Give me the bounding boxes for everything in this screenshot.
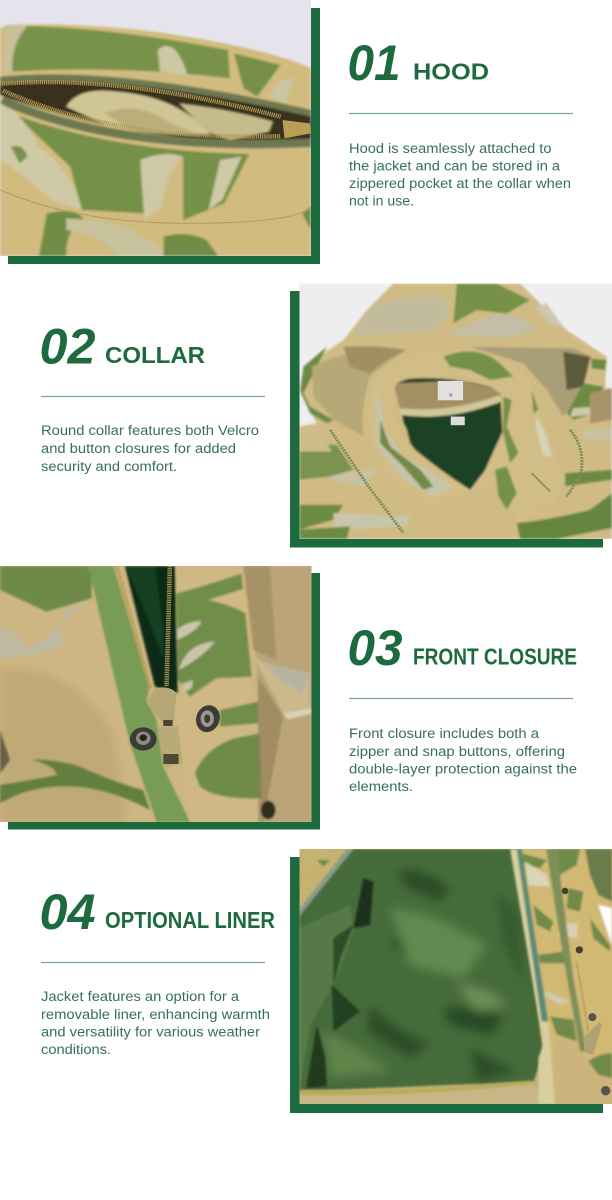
photo frame accent: front closure xyxy=(8,573,320,830)
section 1: hood xyxy=(0,0,573,264)
text: hood description: Hood is seamlessly attached to xyxy=(349,141,552,157)
heading: 01 Hood: 01 xyxy=(348,35,400,91)
text: optional liner description xyxy=(41,989,270,1058)
photo: front zipper and snap buttons xyxy=(0,566,312,822)
text: hood description: the jacket and can be stored in a xyxy=(349,158,560,174)
icon: snap button right xyxy=(192,702,224,735)
text: front closure description xyxy=(349,726,577,795)
text: front closure description: Front closure includes both a xyxy=(349,726,539,742)
photo: hood pocket with zipper xyxy=(0,0,311,256)
section 4: optional liner xyxy=(40,849,612,1113)
text: front closure description: elements. xyxy=(349,779,413,795)
text: hood description: not in use. xyxy=(349,194,414,210)
section 3: front closure xyxy=(0,566,577,830)
text: collar description: and button closures for added xyxy=(41,441,236,457)
text: hood description xyxy=(349,141,571,210)
heading: 02 Collar: COLLAR xyxy=(105,342,205,368)
heading: 02 Collar xyxy=(40,318,205,374)
text: front closure description: zipper and snap buttons, offering xyxy=(349,744,565,760)
heading: 03 Front Closure xyxy=(348,620,577,676)
icon: snap button left xyxy=(130,727,157,751)
section 2: collar xyxy=(40,284,612,548)
text: optional liner description: and versatility for various weather xyxy=(41,1024,260,1040)
heading: 04 Optional Liner xyxy=(40,884,275,940)
icon: drawcords and inner tag xyxy=(330,417,582,533)
photo: fleece liner inside the jacket xyxy=(300,849,612,1104)
photo frame accent: hood xyxy=(8,8,320,264)
heading: 04 Optional Liner: 04 xyxy=(40,884,96,940)
text: collar description: Round collar features both Velcro xyxy=(41,423,259,439)
icon: zipper slider xyxy=(147,687,183,768)
text: hood description: zippered pocket at the collar when xyxy=(349,176,571,192)
heading: 03 Front Closure: 03 xyxy=(348,620,403,676)
icon: size tag M: M xyxy=(449,392,453,397)
fleece shading xyxy=(323,870,523,1081)
text: optional liner description: conditions. xyxy=(41,1042,111,1058)
heading: 01 Hood: HOOD xyxy=(413,58,489,84)
text: optional liner description: removable liner, enhancing warmth xyxy=(41,1007,270,1023)
text: front closure description: double-layer protection against the xyxy=(349,762,577,778)
text: collar description xyxy=(41,423,259,475)
icon: size tag M xyxy=(438,381,463,400)
heading: 02 Collar: 02 xyxy=(40,318,96,374)
heading: 01 Hood xyxy=(348,35,489,91)
icon: zipper slider and buttons xyxy=(562,888,610,1095)
heading: 03 Front Closure: FRONT CLOSURE xyxy=(413,644,577,670)
text: optional liner description: Jacket features an option for a xyxy=(41,989,239,1005)
text: collar description: security and comfort. xyxy=(41,459,177,475)
photo frame accent: collar xyxy=(290,291,603,548)
photo frame accent: optional liner xyxy=(290,857,603,1113)
heading: 04 Optional Liner: OPTIONAL LINER xyxy=(105,907,275,933)
icon: zipper teeth xyxy=(117,566,170,688)
photo: hood and collar with size label xyxy=(300,284,612,539)
icon: hood zipper xyxy=(0,82,311,223)
